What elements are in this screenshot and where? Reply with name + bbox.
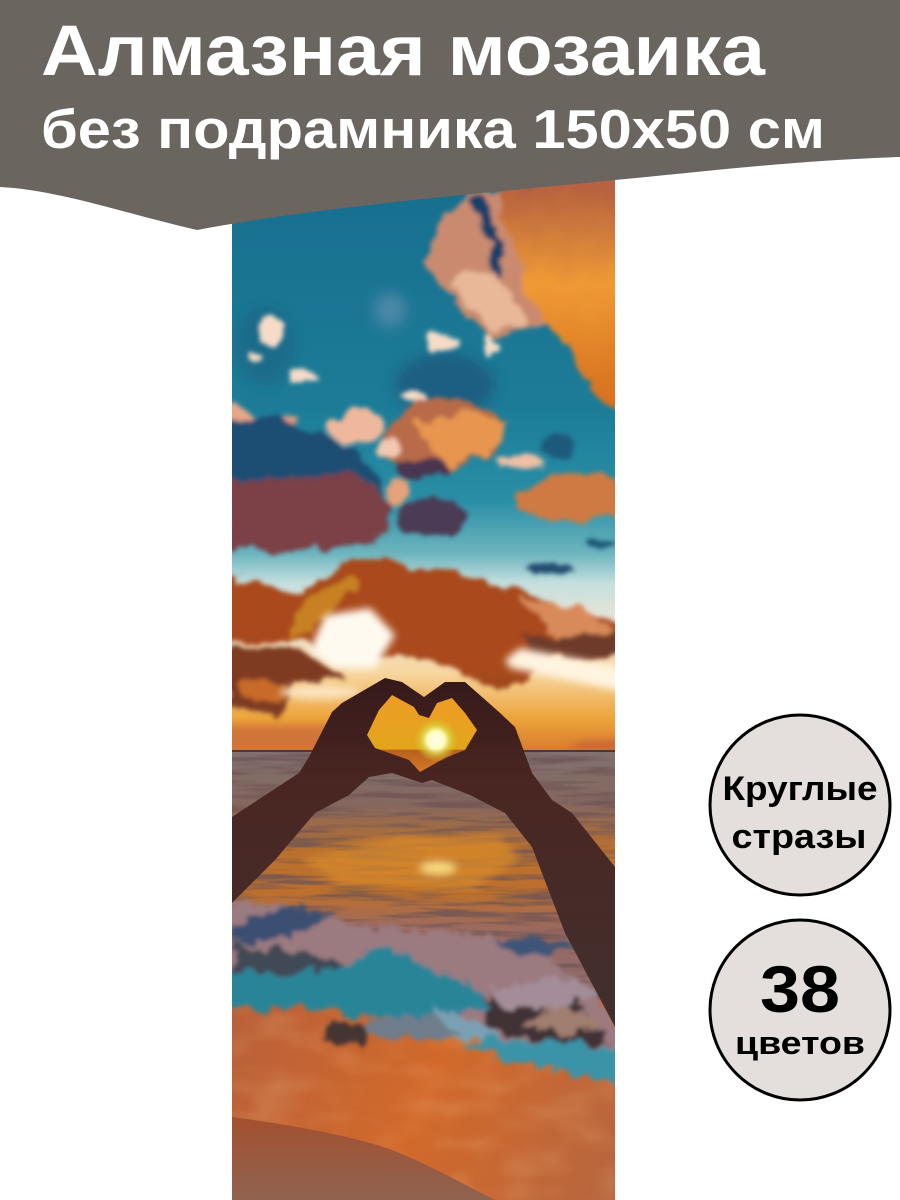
rock — [321, 1022, 369, 1044]
sky — [232, 170, 615, 760]
arms and hands silhouette — [232, 678, 615, 1027]
horizon bands — [225, 725, 625, 750]
small right clouds — [497, 452, 547, 468]
main lower orange cloud — [225, 558, 640, 685]
sea — [232, 752, 615, 1014]
badge: 38 colours — [710, 920, 890, 1100]
sand ripples — [232, 1000, 615, 1200]
dark small cloud — [396, 500, 468, 536]
small white clouds — [248, 317, 496, 402]
badge: round rhinestones — [710, 715, 890, 895]
pink foam behind — [220, 900, 625, 1060]
bright cloud glow — [280, 608, 625, 699]
title: Алмазная мозаика — [41, 12, 766, 91]
badge: 38 colours: 38 — [760, 952, 840, 1026]
picture: sunset beach with heart-shaped hands — [220, 170, 640, 1200]
upper right cloud — [420, 191, 550, 343]
sand — [232, 1000, 615, 1200]
left lower cloud — [225, 648, 348, 717]
sea stripes — [232, 752, 615, 952]
clouds — [225, 170, 640, 717]
horizon line — [232, 750, 615, 752]
blue patches — [235, 905, 335, 945]
pink foam crests right — [490, 975, 600, 1010]
dark wet sand at bottom — [232, 1117, 495, 1200]
subtitle: без подрамника 150х50 см — [41, 98, 825, 160]
dark wave shadows — [232, 945, 350, 975]
peach cloud — [328, 412, 384, 442]
badge: round rhinestones: стразы — [732, 818, 866, 856]
brown clouds left — [225, 472, 395, 552]
header banner — [0, 0, 900, 230]
faint dark areas in the sky — [235, 293, 495, 417]
small dark cloud near hands — [476, 676, 518, 693]
heart opening with sun — [367, 695, 477, 772]
wave foam — [220, 900, 625, 1085]
badge: 38 colours: цветов — [735, 1025, 865, 1061]
teal foam — [225, 948, 488, 1020]
sea highlights — [300, 835, 520, 890]
badge: round rhinestones: Круглые — [722, 770, 878, 808]
lower teal foam — [465, 1037, 625, 1085]
left dark blue cloud — [225, 410, 395, 510]
central orange cloud — [378, 395, 510, 476]
